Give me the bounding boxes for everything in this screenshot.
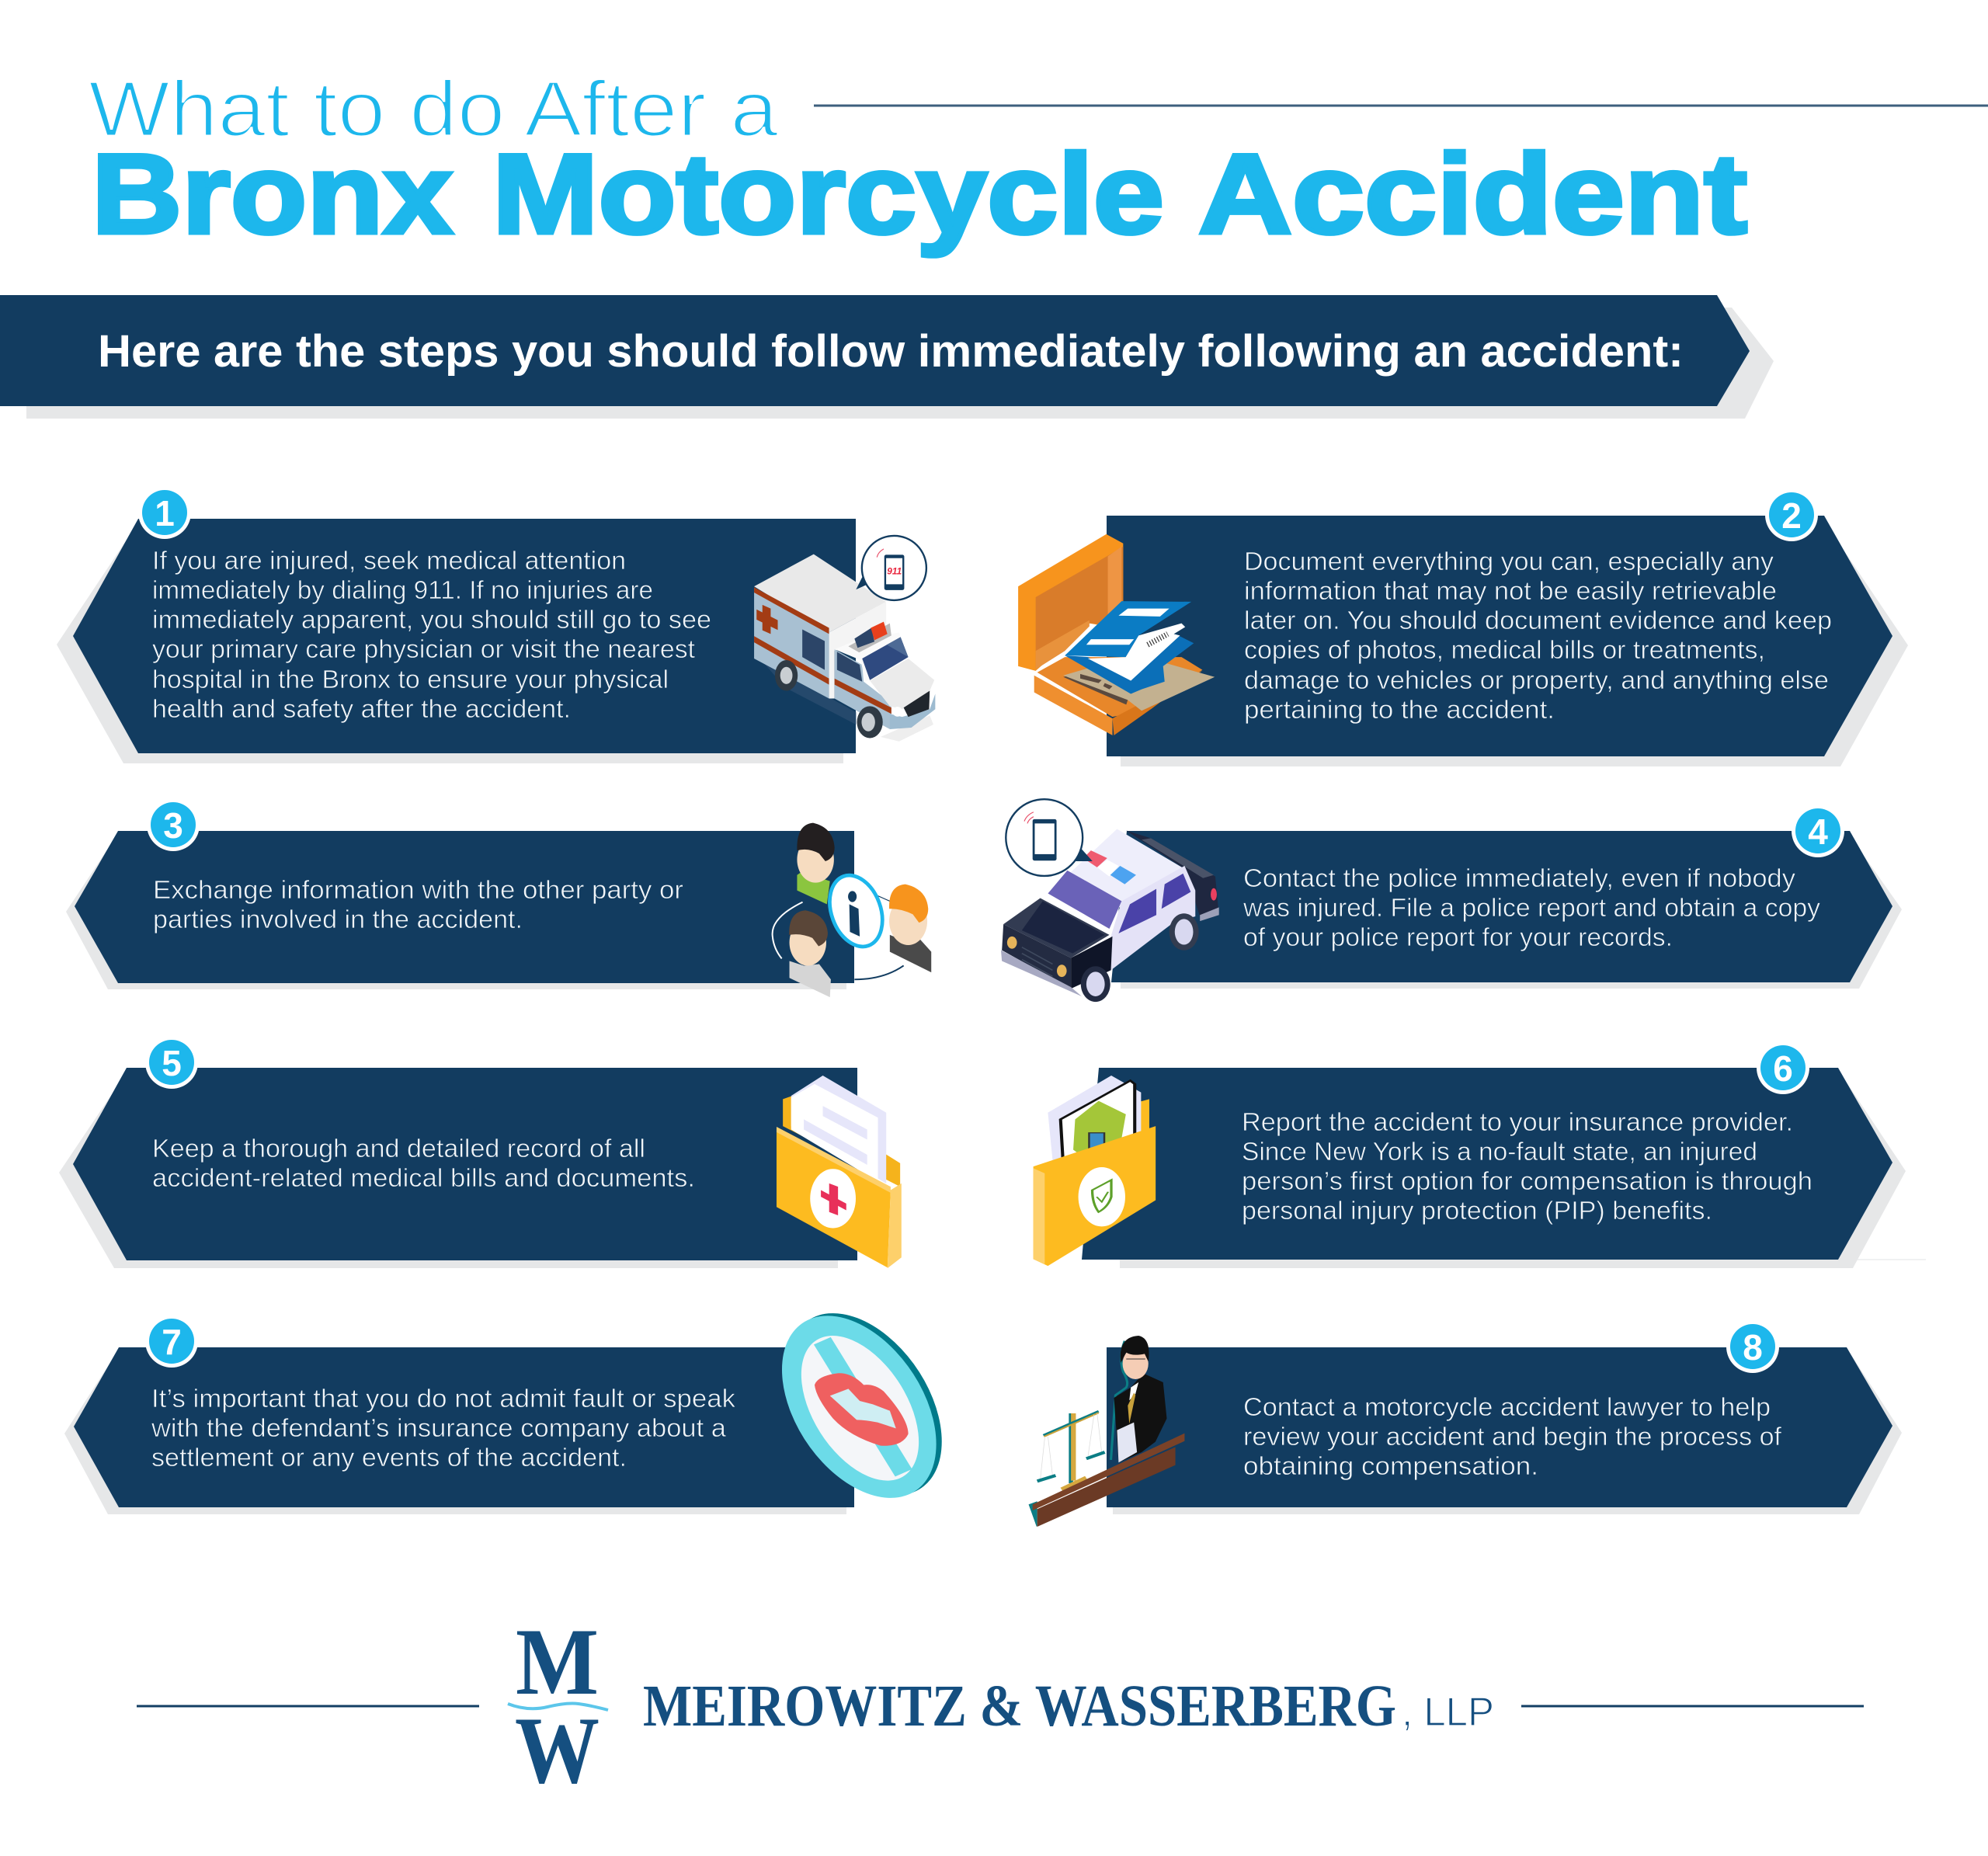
badge 1 bbox=[138, 486, 191, 539]
step 8 text bbox=[1243, 1392, 1782, 1480]
icon: ambulance bbox=[754, 536, 935, 742]
banner bbox=[0, 295, 1774, 419]
panel: step 7 bbox=[64, 1293, 973, 1518]
logo mark: M bbox=[516, 1608, 599, 1715]
step 1 text bbox=[152, 546, 711, 723]
badge 8: 8 bbox=[1743, 1327, 1763, 1368]
title bbox=[89, 66, 1747, 257]
logo mark: W bbox=[515, 1697, 600, 1803]
step 1 text: health and safety after the accident. bbox=[152, 694, 571, 723]
step 8 text: review your accident and begin the process of bbox=[1243, 1422, 1782, 1451]
step 2 text: damage to vehicles or property, and anything else bbox=[1244, 666, 1829, 694]
badge 3: 3 bbox=[163, 805, 183, 846]
badge 5: 5 bbox=[162, 1043, 182, 1083]
panel: step 6 bbox=[1034, 1041, 1926, 1268]
step 8 text: obtaining compensation. bbox=[1243, 1451, 1538, 1480]
panel: step 3 bbox=[66, 798, 931, 997]
panel: step 8 bbox=[1029, 1320, 1902, 1527]
badge 8 bbox=[1726, 1320, 1779, 1373]
title: Bronx bbox=[92, 130, 453, 257]
step 4 text: of your police report for your records. bbox=[1243, 923, 1673, 951]
badge 7 bbox=[145, 1315, 198, 1368]
icon: lawyer and scales bbox=[1029, 1336, 1184, 1527]
panel: step 4 bbox=[1001, 799, 1902, 1002]
step 2 text: later on. You should document evidence and keep bbox=[1244, 606, 1832, 634]
logo wordmark: , LLP bbox=[1402, 1690, 1494, 1735]
icon: people exchanging information bbox=[773, 823, 931, 997]
title: Accident bbox=[1198, 130, 1747, 257]
step 3 text: parties involved in the accident. bbox=[153, 905, 523, 933]
badge 1: 1 bbox=[155, 493, 175, 534]
step 2 text bbox=[1244, 547, 1832, 724]
step 8 text: Contact a motorcycle accident lawyer to help bbox=[1243, 1392, 1771, 1421]
step 6 text: person’s first option for compensation is through bbox=[1242, 1166, 1812, 1195]
badge 2: 2 bbox=[1781, 495, 1802, 536]
badge 7: 7 bbox=[162, 1322, 182, 1362]
step 4 text bbox=[1242, 864, 1821, 951]
step 6 text bbox=[1242, 1107, 1812, 1225]
badge 6: 6 bbox=[1773, 1048, 1793, 1089]
step 1 text: immediately by dialing 911. If no injuries are bbox=[152, 575, 653, 604]
step 1 text: hospital in the Bronx to ensure your physical bbox=[152, 665, 669, 693]
footer logo bbox=[137, 1608, 1864, 1803]
panel: step 1 bbox=[57, 486, 935, 763]
banner: Here are the steps you should follow immediately following an accident: bbox=[98, 326, 1684, 377]
step 7 text: with the defendant’s insurance company about a bbox=[151, 1413, 727, 1442]
icon: police car bbox=[1001, 799, 1219, 1002]
step 3 text bbox=[153, 875, 683, 933]
step 4 text: was injured. File a police report and obtain a copy bbox=[1242, 893, 1821, 922]
step 6 text: Report the accident to your insurance provider. bbox=[1242, 1107, 1793, 1136]
step 1 text: immediately apparent, you should still go to see bbox=[152, 605, 711, 634]
step 7 text: settlement or any events of the accident. bbox=[151, 1443, 627, 1472]
icon: medical folder bbox=[777, 1076, 902, 1268]
icon: insurance folder bbox=[1034, 1076, 1156, 1266]
step 3 text: Exchange information with the other party or bbox=[153, 875, 683, 904]
step 1 text: your primary care physician or visit the nearest bbox=[152, 634, 695, 663]
title: Motorcycle bbox=[492, 130, 1164, 257]
step 5 text: accident-related medical bills and documents. bbox=[152, 1163, 695, 1192]
badge 3 bbox=[147, 798, 200, 851]
step 6 text: Since New York is a no-fault state, an injured bbox=[1242, 1137, 1757, 1166]
step 6 text: personal injury protection (PIP) benefits. bbox=[1242, 1196, 1712, 1225]
step 2 text: pertaining to the accident. bbox=[1244, 695, 1555, 724]
step 2 text: Document everything you can, especially any bbox=[1244, 547, 1774, 575]
badge 5 bbox=[145, 1036, 198, 1089]
logo wordmark: MEIROWITZ & WASSERBERG bbox=[643, 1674, 1396, 1739]
step 5 text bbox=[152, 1134, 695, 1192]
panel: step 2 bbox=[1018, 488, 1908, 766]
icon: no talking sign bbox=[751, 1293, 973, 1518]
step 2 text: copies of photos, medical bills or treatments, bbox=[1244, 635, 1765, 664]
icon: ambulance: 911 bbox=[887, 565, 902, 576]
title: What to do After a bbox=[89, 66, 779, 153]
icon: case with documents bbox=[1018, 534, 1215, 735]
step 2 text: information that may not be easily retrievable bbox=[1244, 576, 1777, 605]
badge 4: 4 bbox=[1808, 812, 1828, 852]
step 1 text: If you are injured, seek medical attention bbox=[152, 546, 626, 575]
step 7 text: It’s important that you do not admit fault or speak bbox=[151, 1384, 736, 1413]
panel: step 5 bbox=[59, 1036, 902, 1268]
badge 2 bbox=[1765, 488, 1818, 541]
step 4 text: Contact the police immediately, even if nobody bbox=[1243, 864, 1796, 892]
badge 6 bbox=[1757, 1041, 1809, 1094]
step 7 text bbox=[151, 1384, 736, 1472]
logo mark bbox=[508, 1608, 608, 1803]
badge 4 bbox=[1792, 805, 1844, 857]
step 5 text: Keep a thorough and detailed record of all bbox=[152, 1134, 645, 1163]
